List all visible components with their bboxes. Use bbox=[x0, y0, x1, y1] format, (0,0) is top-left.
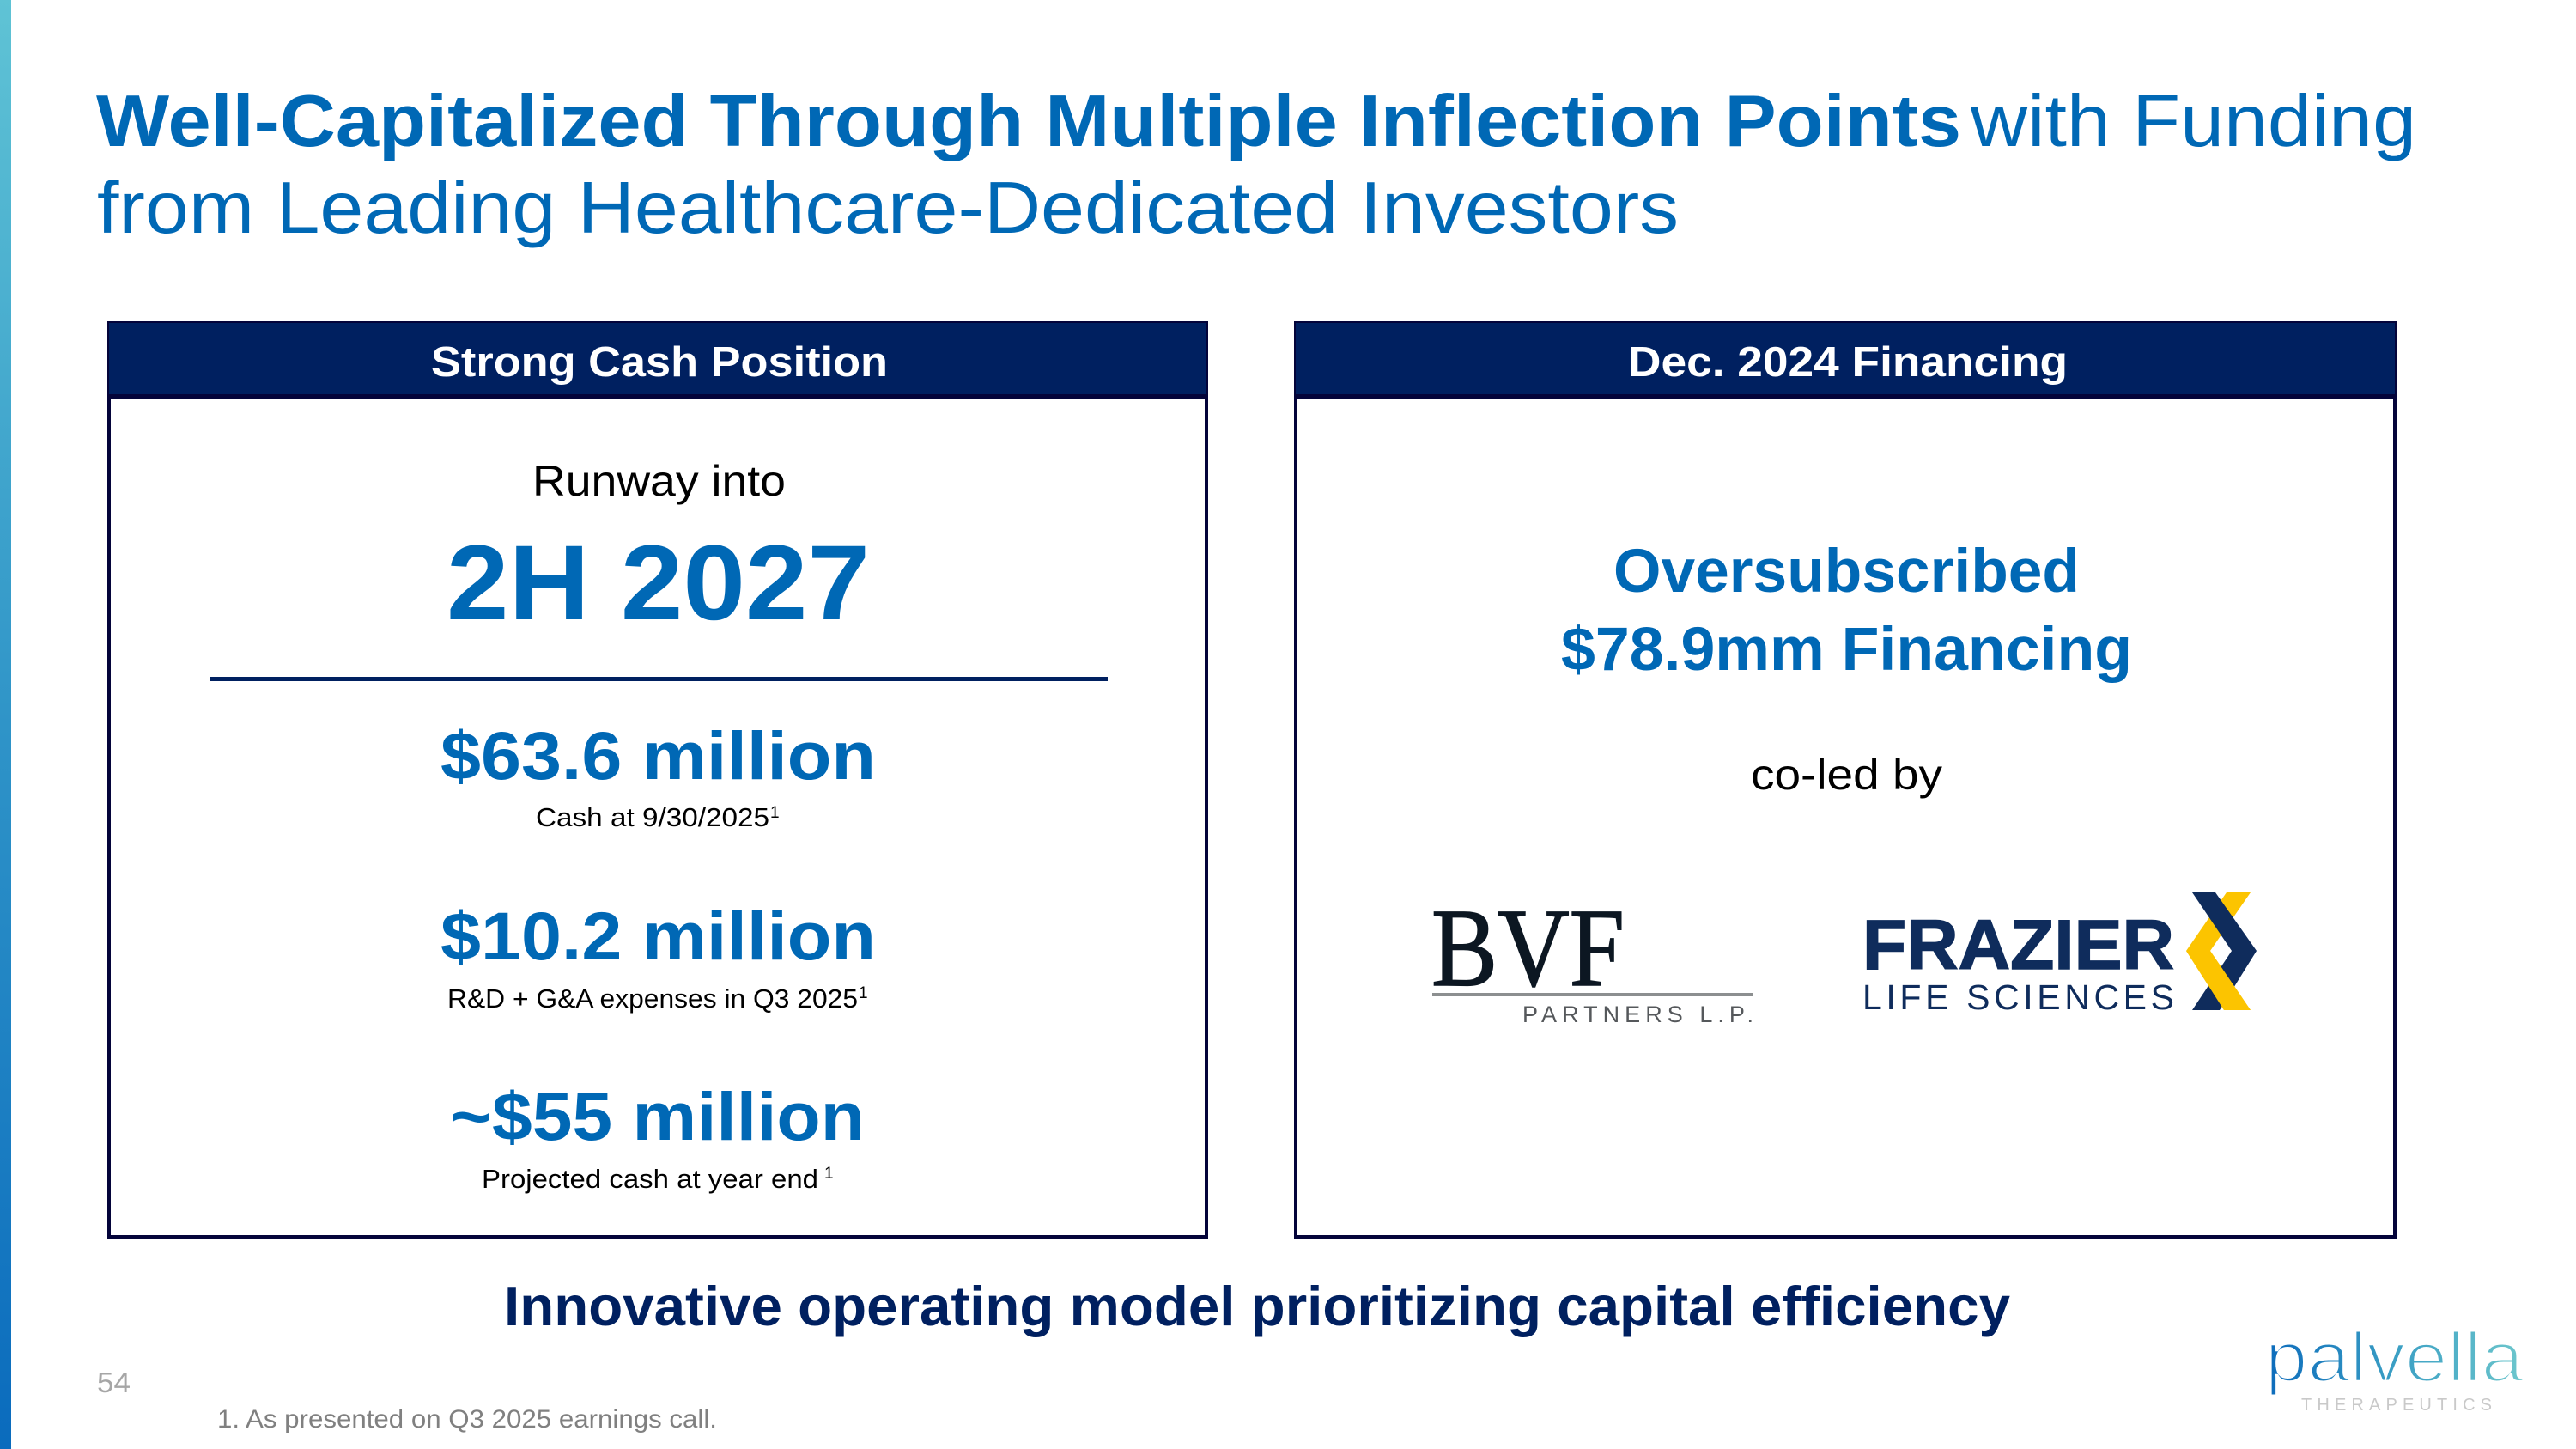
stat: projected cash: 1 bbox=[824, 1165, 834, 1183]
stat: projected cash bbox=[450, 1078, 865, 1194]
logo: Frazier Life Sciences: FRAZIER bbox=[1862, 906, 2174, 984]
title: Well-Capitalized Through Multiple Inflection Points bbox=[96, 81, 1961, 162]
title: from Leading Healthcare-Dedicated Investors bbox=[97, 167, 1679, 249]
stat: projected cash: Projected cash at year end bbox=[482, 1164, 818, 1194]
logo: Palvella Therapeutics: THERAPEUTICS bbox=[2301, 1396, 2492, 1415]
financing headline: Oversubscribed bbox=[1613, 538, 2080, 606]
logo: BVF Partners: PARTNERS L.P. bbox=[1522, 1002, 1753, 1027]
stat: expenses: 1 bbox=[859, 984, 868, 1002]
panel header: Strong Cash Position bbox=[431, 339, 888, 386]
logo: BVF Partners bbox=[1431, 886, 1753, 1027]
panel header bbox=[1294, 321, 2397, 399]
stat: expenses bbox=[440, 898, 876, 1014]
stat: cash: 1 bbox=[770, 804, 780, 822]
financing headline: $78.9mm Financing bbox=[1561, 616, 2132, 684]
left accent bar bbox=[0, 0, 11, 1449]
divider bbox=[210, 677, 1108, 681]
panel header bbox=[107, 321, 1208, 399]
page number: 54 bbox=[97, 1367, 131, 1398]
logo: BVF Partners: BVF bbox=[1431, 886, 1625, 1010]
logo: Frazier Life Sciences bbox=[1862, 892, 2257, 1017]
stat: cash: Cash at 9/30/2025 bbox=[536, 802, 769, 832]
panel header: Dec. 2024 Financing bbox=[1628, 339, 2068, 386]
title: with Funding bbox=[1970, 81, 2416, 162]
footnote: 1. As presented on Q3 2025 earnings call. bbox=[217, 1405, 717, 1434]
runway date: 2H 2027 bbox=[447, 524, 870, 642]
stat: projected cash: ~$55 million bbox=[450, 1078, 865, 1154]
financing headline bbox=[1561, 538, 2132, 684]
icon: chevron mark bbox=[2186, 892, 2257, 1010]
panel: december 2024 financing bbox=[1294, 321, 2397, 1237]
logo: Frazier Life Sciences: LIFE SCIENCES bbox=[1862, 977, 2174, 1017]
runway label: Runway into bbox=[532, 457, 786, 505]
co-led label: co-led by bbox=[1751, 751, 1942, 799]
title bbox=[96, 81, 2416, 249]
stat: expenses: R&D + G&A expenses in Q3 2025 bbox=[447, 983, 858, 1014]
panel: strong cash position bbox=[107, 321, 1208, 1237]
panel frame bbox=[109, 323, 1206, 1237]
stat: expenses: $10.2 million bbox=[440, 898, 876, 974]
stat: cash: $63.6 million bbox=[440, 717, 876, 794]
panel frame bbox=[1296, 323, 2395, 1237]
stat: cash bbox=[440, 717, 876, 832]
tagline: Innovative operating model prioritizing capital efficiency bbox=[504, 1275, 2010, 1337]
logo: Palvella Therapeutics: palvella bbox=[2265, 1318, 2524, 1397]
